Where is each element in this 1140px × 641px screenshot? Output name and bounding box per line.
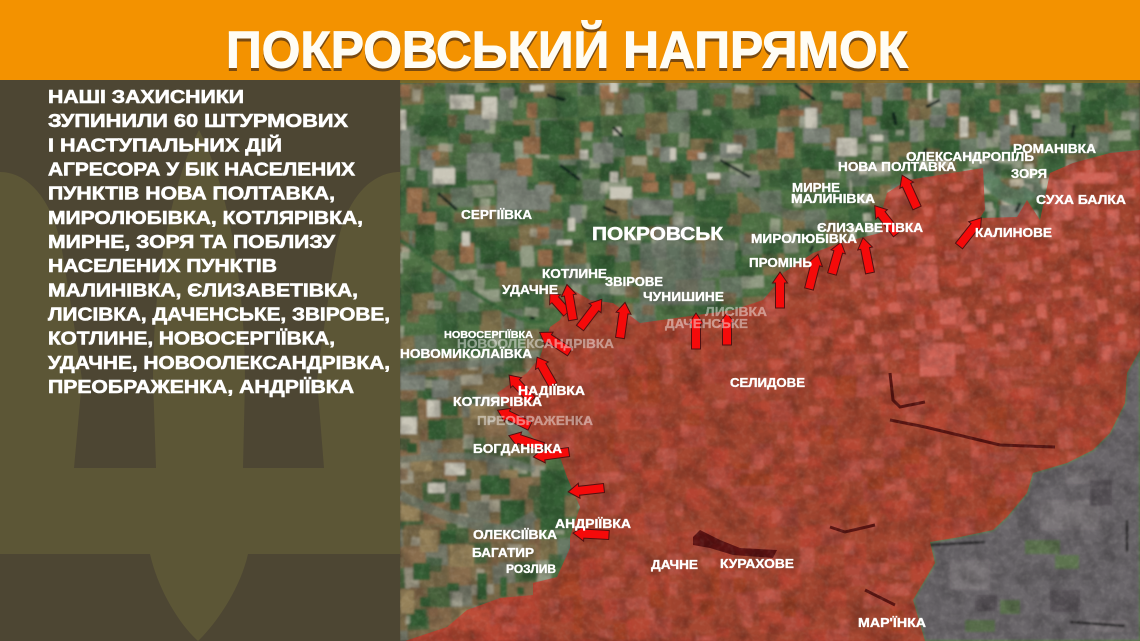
map label: МАР'ЇНКА [858, 615, 927, 630]
summary text: МИРНЕ, ЗОРЯ ТА ПОБЛИЗУ [48, 232, 336, 252]
arrow [497, 408, 532, 431]
map label: ЗВІРОВЕ [605, 274, 663, 289]
summary text: КОТЛИНЕ, НОВОСЕРГІЇВКА, [48, 329, 335, 349]
arrow [954, 217, 982, 250]
arrow [573, 526, 609, 542]
arrow [549, 294, 567, 316]
map label: ПОКРОВСЬК [592, 224, 724, 244]
map label: СЕРГІЇВКА [461, 207, 533, 222]
arrow [560, 284, 578, 322]
map label: КОТЛЯРІВКА [453, 394, 543, 409]
map label: НОВОМИКОЛАЇВКА [400, 346, 533, 361]
grey zone south-east [913, 350, 1140, 641]
summary text: ЛИСІВКА, ДАЧЕНСЬКЕ, ЗВІРОВЕ, [48, 304, 390, 324]
arrow [508, 374, 536, 402]
map label: ЗОРЯ [1011, 166, 1047, 181]
map label: НОВА ПОЛТАВКА [838, 159, 957, 174]
map label: КОТЛИНЕ [542, 266, 607, 281]
map label: СУХА БАЛКА [1036, 192, 1127, 207]
trident emblem [0, 130, 400, 641]
arrow [508, 431, 545, 451]
map label: РОМАНІВКА [1013, 141, 1097, 156]
map label: КУРАХОВЕ [720, 556, 794, 571]
summary text: ПРЕОБРАЖЕНКА, АНДРІЇВКА [48, 377, 354, 397]
arrow [576, 298, 602, 332]
summary text [48, 87, 390, 397]
settlement ribbons [400, 495, 535, 530]
arrow [772, 272, 788, 308]
arrow [857, 237, 875, 274]
map [400, 80, 1140, 641]
map label: МИРОЛЮБІВКА [751, 231, 858, 246]
summary text: ПУНКТІВ НОВА ПОЛТАВКА, [48, 184, 335, 204]
map label: ОЛЕКСІЇВКА [473, 527, 558, 542]
arrow [874, 205, 900, 238]
map label: ПРЕОБРАЖЕНКА [477, 413, 594, 428]
reservoir [693, 530, 777, 558]
map label: БАГАТИР [472, 545, 534, 560]
map label: ЛИСІВКА [705, 304, 768, 319]
title: ПОКРОВСЬКИЙ НАПРЯМОК [226, 24, 908, 82]
map label: ДАЧЕНСЬКЕ [665, 316, 748, 331]
summary text: НАШІ ЗАХИСНИКИ [48, 87, 244, 107]
summary text: НАСЕЛЕНИХ ПУНКТІВ [48, 256, 277, 276]
arrow [899, 174, 922, 210]
texture [400, 80, 1140, 641]
map label: НОВООЛЕКСАНДРІВКА [457, 336, 615, 351]
map label: НАДІЇВКА [518, 383, 586, 398]
map label: ПРОМІНЬ [749, 255, 812, 270]
map label: ЄЛИЗАВЕТІВКА [817, 220, 924, 235]
map label: МИРНЕ [792, 180, 840, 195]
arrow [534, 356, 558, 388]
map label: СЕЛИДОВЕ [730, 375, 805, 390]
summary text: УДАЧНЕ, НОВООЛЕКСАНДРІВКА, [48, 353, 390, 373]
map label: УДАЧНЕ [502, 282, 558, 297]
ravines [830, 373, 1055, 605]
summary text: МИРОЛЮБІВКА, КОТЛЯРІВКА, [48, 208, 363, 228]
map label: ЧУНИШИНЕ [643, 289, 724, 304]
map label: РОЗЛИВ [506, 562, 556, 576]
title: ПОКРОВСЬКИЙ НАПРЯМОК [226, 20, 908, 80]
map label: ДАЧНЕ [651, 557, 698, 572]
arrow [827, 242, 846, 276]
panel: left text panel [0, 80, 400, 641]
map label: КАЛИНОВЕ [975, 225, 1052, 240]
arrow [688, 313, 704, 349]
map label: БОГДАНІВКА [473, 441, 563, 456]
arrow [720, 313, 734, 345]
header band [0, 0, 1140, 82]
fields beneath the occupied zone [560, 357, 1007, 640]
arrow [567, 481, 605, 499]
arrow [532, 447, 570, 464]
map label: ОЛЕКСАНДРОПІЛЬ [906, 149, 1034, 164]
map label: АНДРІЇВКА [555, 516, 632, 531]
rivers [438, 85, 1074, 318]
map label: НОВОСЕРГІЇВКА [444, 328, 533, 341]
arrow [615, 302, 632, 340]
occupied territory overlay [405, 150, 1140, 641]
summary text: МАЛИНІВКА, ЄЛИЗАВЕТІВКА, [48, 280, 358, 300]
map label: МАЛИНІВКА [791, 191, 876, 206]
arrow [804, 253, 824, 291]
summary text: І НАСТУПАЛЬНИХ ДІЙ [48, 134, 282, 155]
summary text: АГРЕСОРА У БІК НАСЕЛЕНИХ [48, 160, 355, 180]
arrow [539, 332, 573, 356]
summary text: ЗУПИНИЛИ 60 ШТУРМОВИХ [48, 111, 348, 131]
